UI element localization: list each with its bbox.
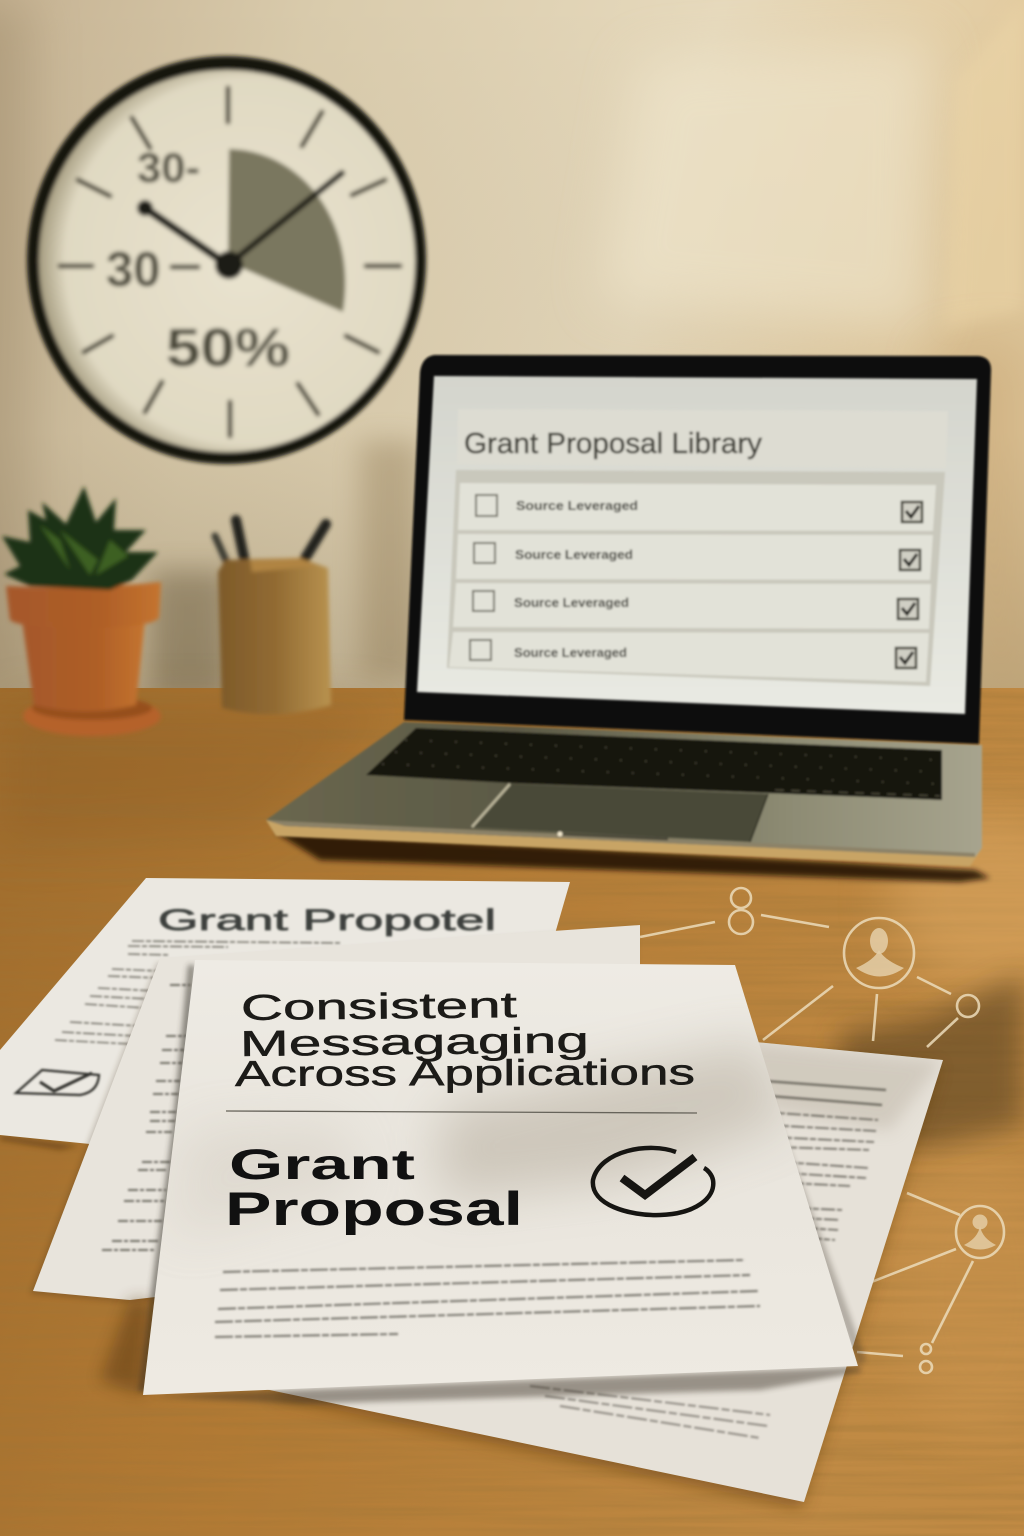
network node: lower person — [956, 1206, 1004, 1258]
paper stack — [0, 878, 943, 1508]
laptop lid — [404, 355, 991, 744]
check icon — [593, 1148, 713, 1215]
front sheet title: Proposal — [225, 1182, 523, 1235]
potted plant — [2, 486, 161, 736]
trackpad — [472, 784, 768, 842]
network node: small right — [957, 995, 979, 1017]
front sheet heading — [235, 984, 695, 1094]
list row 3 — [453, 583, 931, 629]
list row 2 — [456, 534, 933, 580]
cast shadow on desk — [835, 975, 1024, 1148]
back left sheet — [0, 878, 570, 1150]
front sheet — [100, 960, 866, 1404]
list row 2: Source Leveraged — [515, 547, 633, 562]
list row 1: Source Leveraged — [516, 498, 638, 513]
desk surface — [0, 688, 1024, 1536]
clock ticks — [60, 88, 400, 436]
library window — [447, 409, 948, 686]
pencil cup — [215, 520, 331, 714]
front sheet body lines — [215, 1260, 760, 1337]
list row 4: Source Leveraged — [514, 645, 627, 660]
clock sector — [228, 149, 345, 312]
wall background — [0, 0, 1024, 720]
list row 3: Source Leveraged — [514, 595, 629, 610]
front sheet title: Grant — [229, 1141, 415, 1189]
list row 4 — [449, 632, 929, 682]
laptop — [266, 355, 991, 866]
clock hands — [137, 173, 342, 279]
plant leaves — [2, 486, 158, 590]
laptop shadow on desk — [275, 832, 990, 882]
network node: top — [729, 888, 753, 934]
screen title: Grant Proposal Library — [464, 428, 763, 460]
wall clock: 50% — [166, 318, 290, 378]
front sheet heading: Messagaging — [240, 1019, 589, 1064]
laptop screen — [417, 376, 977, 714]
network graphic — [640, 888, 1004, 1373]
bottom right sheet — [260, 1040, 943, 1508]
network node: person — [844, 918, 914, 988]
list row 1 — [458, 483, 936, 531]
front sheet heading: Across Applications — [235, 1051, 695, 1094]
back sheet title: Grant Propotel — [158, 904, 496, 937]
back sheet check icon — [16, 1070, 99, 1095]
wall clock: 30 — [106, 243, 161, 297]
front sheet heading: Consistent — [241, 984, 517, 1028]
clock numerals: 30- — [137, 144, 200, 191]
middle left sheet — [30, 925, 640, 1303]
front sheet edge shadow — [150, 1367, 862, 1404]
keyboard — [366, 728, 942, 800]
front sheet title — [225, 1141, 523, 1235]
network node: bottom — [920, 1344, 932, 1373]
wall clock — [27, 56, 426, 464]
laptop base — [266, 722, 982, 866]
